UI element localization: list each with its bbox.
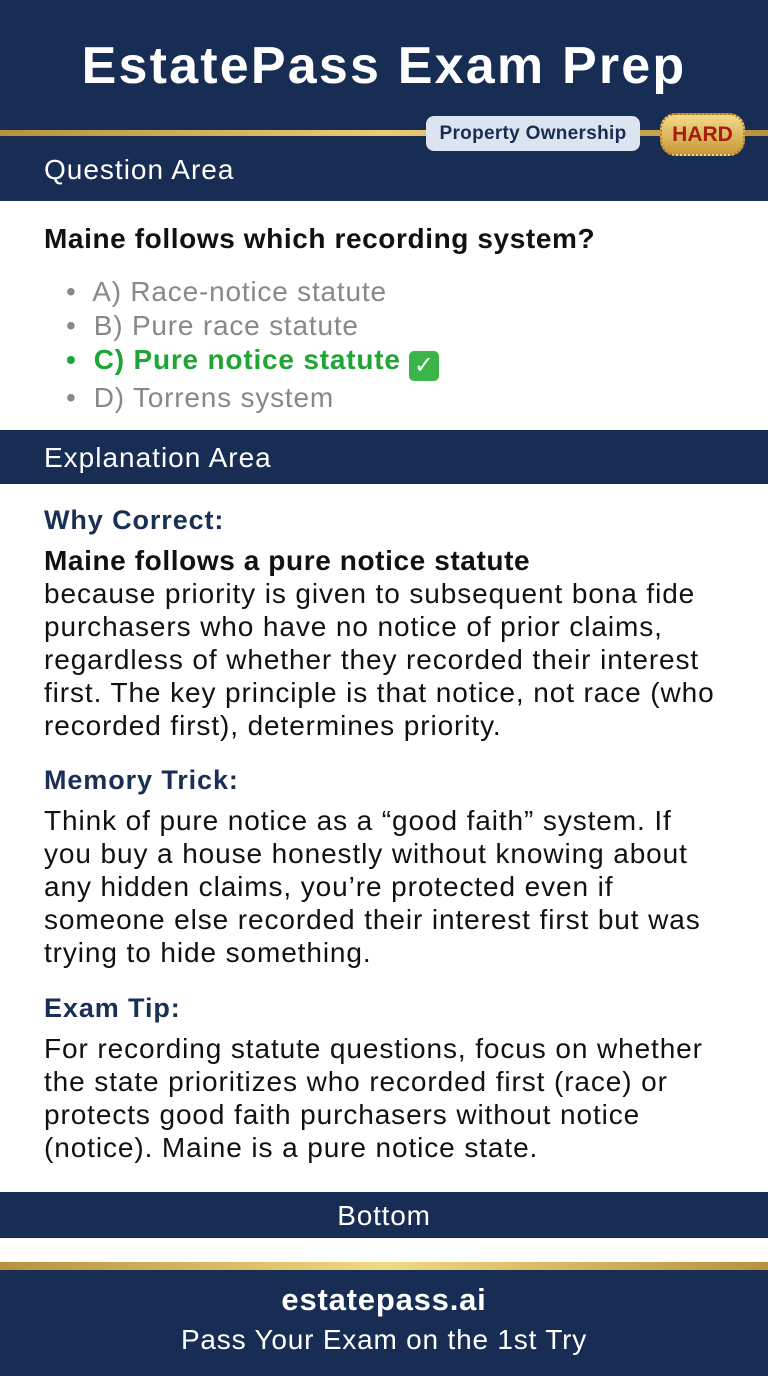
header panel [0,0,768,201]
gold rule [0,130,768,136]
why correct [44,505,715,741]
options list: • A) Race-notice statute [66,276,387,307]
section bar: explanation [0,430,768,484]
footer [0,1270,768,1376]
memory trick: Memory Trick: [44,765,239,795]
why correct: regardless of whether they recorded their interest [44,644,699,675]
section bar: bottom [0,1192,768,1238]
options list [66,276,439,413]
brand: estatepass.ai [281,1282,487,1317]
gold rule [0,1262,768,1270]
memory trick: any hidden claims, you’re protected even if [44,871,613,902]
section bar: bottom: Bottom [337,1200,431,1231]
badge: difficulty: HARD [672,123,733,146]
badge: category [426,116,640,151]
tagline: Pass Your Exam on the 1st Try [181,1324,587,1355]
badge: difficulty [660,113,745,156]
memory trick: someone else recorded their interest first but was [44,904,701,935]
section bar: explanation: Explanation Area [44,442,272,473]
exam tip: the state prioritizes who recorded first (race) or [44,1066,668,1097]
memory trick: you buy a house honestly without knowing about [44,838,688,869]
correct option: • C) Pure notice statute [66,344,401,375]
badge: category: Property Ownership [440,123,626,144]
why correct: Maine follows a pure notice statute [44,545,530,576]
memory trick: Think of pure notice as a “good faith” system. If [44,805,672,836]
title: EstatePass Exam Prep [82,37,686,95]
correct option: ✓ [414,352,435,379]
why correct: because priority is given to subsequent bona fide [44,578,695,609]
exam tip: For recording statute questions, focus on whether [44,1033,703,1064]
why correct: purchasers who have no notice of prior claims, [44,611,663,642]
memory trick: trying to hide something. [44,937,372,968]
section label: question: Question Area [44,154,234,185]
exam tip: (notice). Maine is a pure notice state. [44,1132,538,1163]
exam tip: Exam Tip: [44,993,181,1023]
why correct: recorded first), determines priority. [44,710,502,741]
exam tip [44,993,703,1163]
exam tip: protects good faith purchasers without notice [44,1099,640,1130]
options list: • D) Torrens system [66,382,334,413]
options list: • B) Pure race statute [66,310,359,341]
why correct: first. The key principle is that notice, not race (who [44,677,715,708]
memory trick [44,765,701,968]
why correct: Why Correct: [44,505,224,535]
question: Maine follows which recording system? [44,223,595,254]
